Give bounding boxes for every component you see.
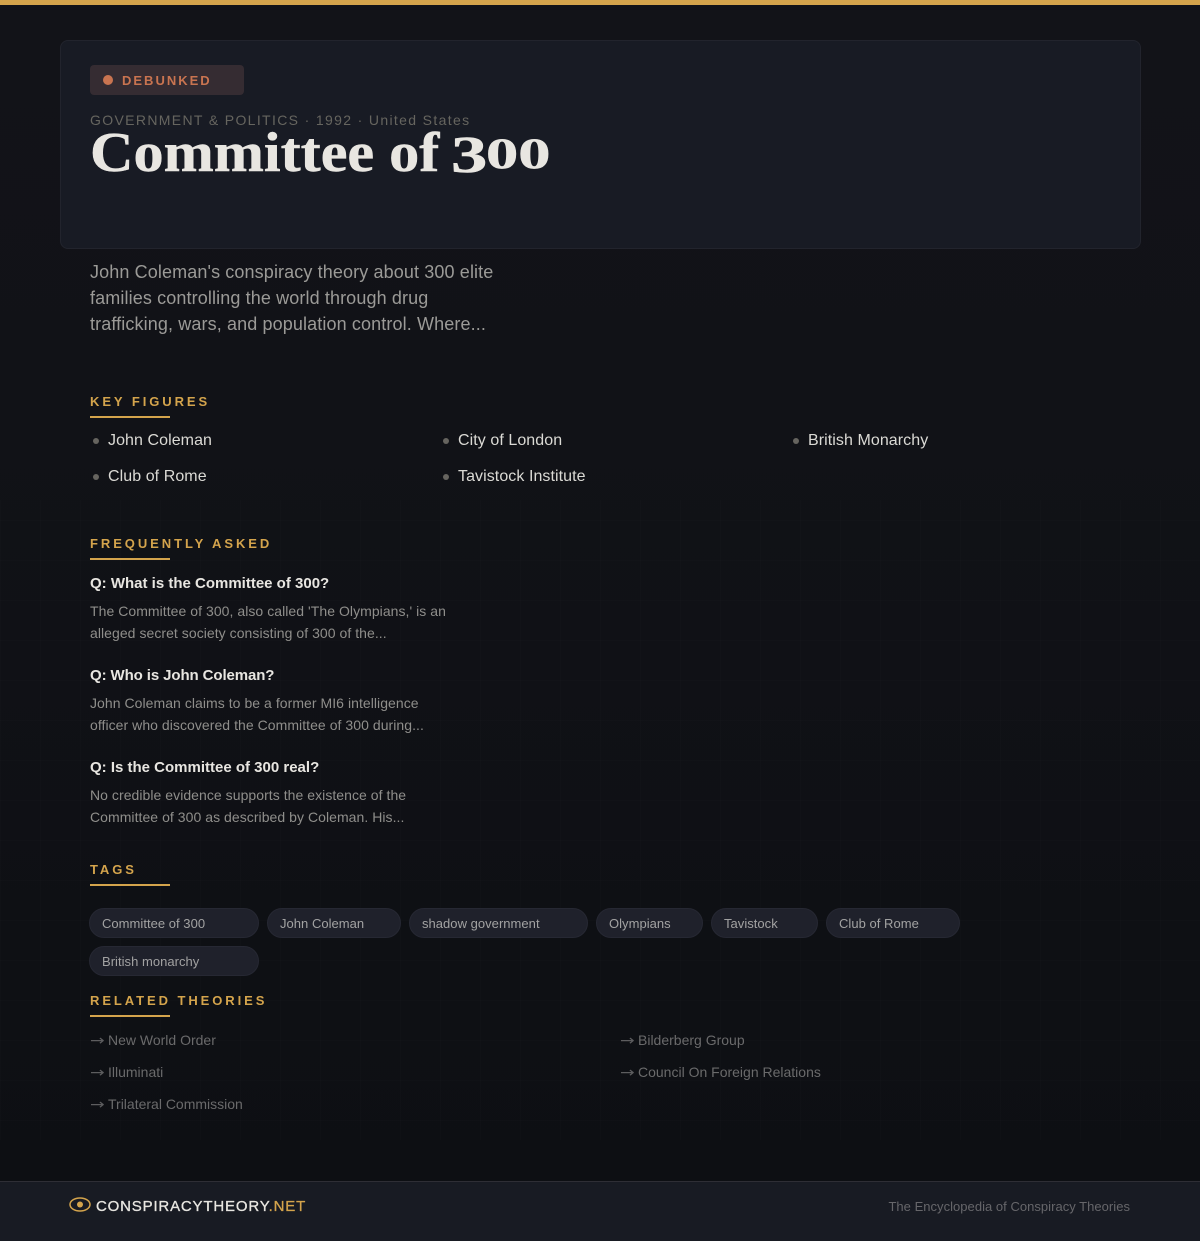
text: officer who discovered the Committee of 300 during... bbox=[90, 717, 424, 733]
tag pills: British monarchy bbox=[102, 954, 199, 969]
top accent bar bbox=[0, 0, 1200, 5]
tag pills: shadow government bbox=[422, 916, 540, 931]
summary: families controlling the world through drug bbox=[90, 288, 428, 308]
related theories links: Trilateral Commission bbox=[108, 1096, 243, 1112]
key figures list: British Monarchy bbox=[808, 432, 928, 449]
status badge: debunked bbox=[90, 65, 244, 95]
related theories links: → bbox=[620, 1065, 635, 1081]
summary bbox=[90, 262, 493, 334]
tag pills: Club of Rome bbox=[839, 916, 919, 931]
faq 1: Q: What is the Committee of 300? bbox=[90, 575, 329, 592]
title: 3 bbox=[451, 127, 487, 184]
header panel bbox=[60, 40, 1140, 248]
related theories links: → bbox=[90, 1033, 105, 1049]
related theories links: → bbox=[90, 1097, 105, 1113]
tag pills bbox=[89, 908, 960, 976]
footer bbox=[0, 1181, 1200, 1241]
related theories links bbox=[90, 1032, 821, 1113]
heading: frequently asked: FREQUENTLY ASKED bbox=[90, 536, 272, 551]
key figures list: Club of Rome bbox=[108, 468, 207, 485]
summary: John Coleman's conspiracy theory about 300 elite bbox=[90, 262, 493, 282]
related theories links: → bbox=[620, 1033, 635, 1049]
faq 2: Q: Who is John Coleman? bbox=[90, 667, 274, 684]
related theories links: New World Order bbox=[108, 1032, 216, 1048]
category meta line: GOVERNMENT & POLITICS · 1992 · United States bbox=[90, 112, 470, 128]
key figures list: Tavistock Institute bbox=[458, 468, 586, 485]
summary: trafficking, wars, and population control. Where... bbox=[90, 314, 486, 334]
footer tagline: The Encyclopedia of Conspiracy Theories bbox=[888, 1199, 1130, 1214]
text: alleged secret society consisting of 300 of the... bbox=[90, 625, 387, 641]
key figures list: John Coleman bbox=[108, 432, 212, 449]
heading: tags: TAGS bbox=[90, 862, 137, 877]
title: Committee of bbox=[90, 122, 439, 184]
text: John Coleman claims to be a former MI6 intelligence bbox=[90, 695, 419, 711]
related theories links: → bbox=[90, 1065, 105, 1081]
text: No credible evidence supports the existence of the bbox=[90, 787, 406, 803]
heading: related theories: RELATED THEORIES bbox=[90, 993, 267, 1008]
tag pills: Committee of 300 bbox=[102, 916, 205, 931]
related theories links: Bilderberg Group bbox=[638, 1032, 745, 1048]
icon: eye logo bbox=[69, 1197, 91, 1212]
faq 3: Q: Is the Committee of 300 real? bbox=[90, 759, 319, 776]
text: The Committee of 300, also called 'The Olympians,' is an bbox=[90, 603, 446, 619]
badge dot bbox=[103, 75, 113, 85]
tag pills: John Coleman bbox=[280, 916, 364, 931]
heading: key figures: KEY FIGURES bbox=[90, 394, 210, 409]
tag pills: Olympians bbox=[609, 916, 671, 931]
related theories links: Illuminati bbox=[108, 1064, 163, 1080]
tag pills: Tavistock bbox=[724, 916, 778, 931]
related theories links: Council On Foreign Relations bbox=[638, 1064, 821, 1080]
title: 00 bbox=[486, 131, 550, 178]
key figures list: City of London bbox=[458, 432, 562, 449]
key figures list bbox=[93, 432, 928, 485]
wordmark: CONSPIRACYTHEORY.NET bbox=[96, 1198, 306, 1215]
badge label: DEBUNKED bbox=[122, 73, 212, 88]
text: Committee of 300 as described by Coleman. His... bbox=[90, 809, 404, 825]
